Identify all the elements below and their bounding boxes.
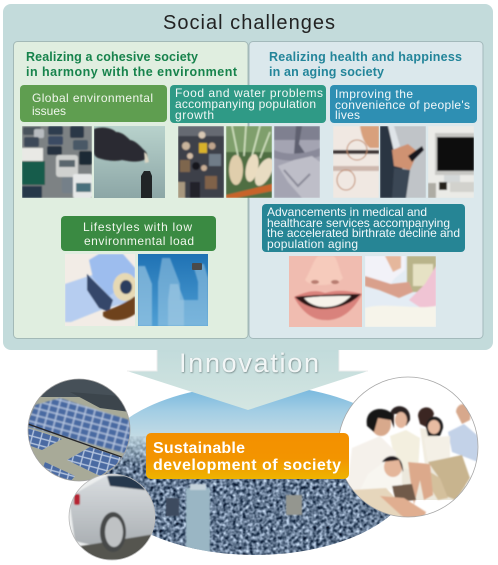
label: global environmental issues: issues bbox=[32, 104, 66, 118]
label: medical and healthcare services: population aging bbox=[267, 237, 358, 251]
label: medical and healthcare services bbox=[262, 204, 465, 252]
label: improving convenience: convenience of people's bbox=[335, 98, 470, 112]
photo: vegetables bbox=[226, 126, 272, 198]
photo circle: solar panels bbox=[26, 379, 132, 483]
callout: sustainable development: Sustainable bbox=[153, 440, 245, 457]
label: lifestyles with low environmental load: environmental load bbox=[84, 234, 194, 248]
panel: cohesive society bbox=[14, 42, 248, 338]
heading: cohesive society bbox=[26, 50, 238, 79]
woman right bbox=[420, 428, 438, 464]
label: improving convenience bbox=[330, 85, 477, 123]
photo: businessman with phone bbox=[380, 126, 426, 198]
panel: social challenges bbox=[3, 4, 493, 350]
photo: smokestack bbox=[94, 126, 165, 198]
photo: computer monitor bbox=[428, 126, 474, 198]
label: food and water problems bbox=[170, 85, 326, 123]
photo circle: silver car bbox=[69, 474, 155, 560]
older man bbox=[448, 424, 478, 462]
heading: cohesive society: in harmony with the environment bbox=[26, 65, 238, 79]
label: lifestyles with low environmental load: Lifestyles with low bbox=[83, 220, 192, 234]
man bbox=[347, 436, 396, 490]
label: improving convenience: lives bbox=[335, 108, 360, 122]
cushion bbox=[353, 488, 402, 516]
photo circle: family bbox=[338, 377, 478, 518]
label: lifestyles with low environmental load bbox=[61, 216, 216, 251]
title: Social challenges bbox=[163, 12, 335, 34]
label: medical and healthcare services: healthcare services accompanying bbox=[267, 216, 450, 230]
photo: smile bbox=[289, 256, 362, 327]
label: medical and healthcare services: the accelerated birthrate decline and bbox=[267, 226, 460, 240]
label: food and water problems: growth bbox=[175, 108, 214, 122]
heading: cohesive society: Realizing a cohesive society bbox=[26, 50, 198, 64]
arrow: innovation bbox=[127, 348, 368, 410]
panel: health and happiness bbox=[249, 42, 483, 338]
label: global environmental issues bbox=[20, 85, 167, 122]
photo: nurse holding hands bbox=[365, 256, 436, 327]
photo: glasses and pen bbox=[333, 126, 379, 198]
heading: health and happiness bbox=[269, 50, 462, 79]
trousers bbox=[428, 455, 470, 500]
callout: sustainable development: development of society bbox=[153, 457, 341, 474]
woman legs bbox=[408, 462, 433, 505]
label: food and water problems: accompanying population bbox=[175, 97, 316, 111]
heading: health and happiness: in an aging society bbox=[269, 65, 384, 79]
label: global environmental issues: Global environmental bbox=[32, 91, 153, 105]
label: medical and healthcare services: Advancements in medical and bbox=[267, 205, 427, 219]
city skyline ellipse bbox=[104, 390, 390, 555]
photo: traffic bbox=[22, 126, 92, 198]
label: food and water problems: Food and water problems bbox=[175, 86, 323, 100]
photo: film roll bbox=[65, 254, 135, 326]
girl bbox=[426, 417, 443, 436]
child bbox=[396, 472, 403, 486]
arrow label: Innovation bbox=[179, 348, 319, 378]
label: improving convenience: Improving the bbox=[335, 87, 413, 101]
callout: sustainable development bbox=[146, 433, 349, 479]
photo: water bbox=[274, 126, 320, 198]
heading: health and happiness: Realizing health and happiness bbox=[269, 50, 462, 64]
woman centre bbox=[390, 430, 420, 472]
photo: plastic bottles bbox=[138, 254, 208, 326]
photo: crowd bbox=[178, 126, 224, 198]
